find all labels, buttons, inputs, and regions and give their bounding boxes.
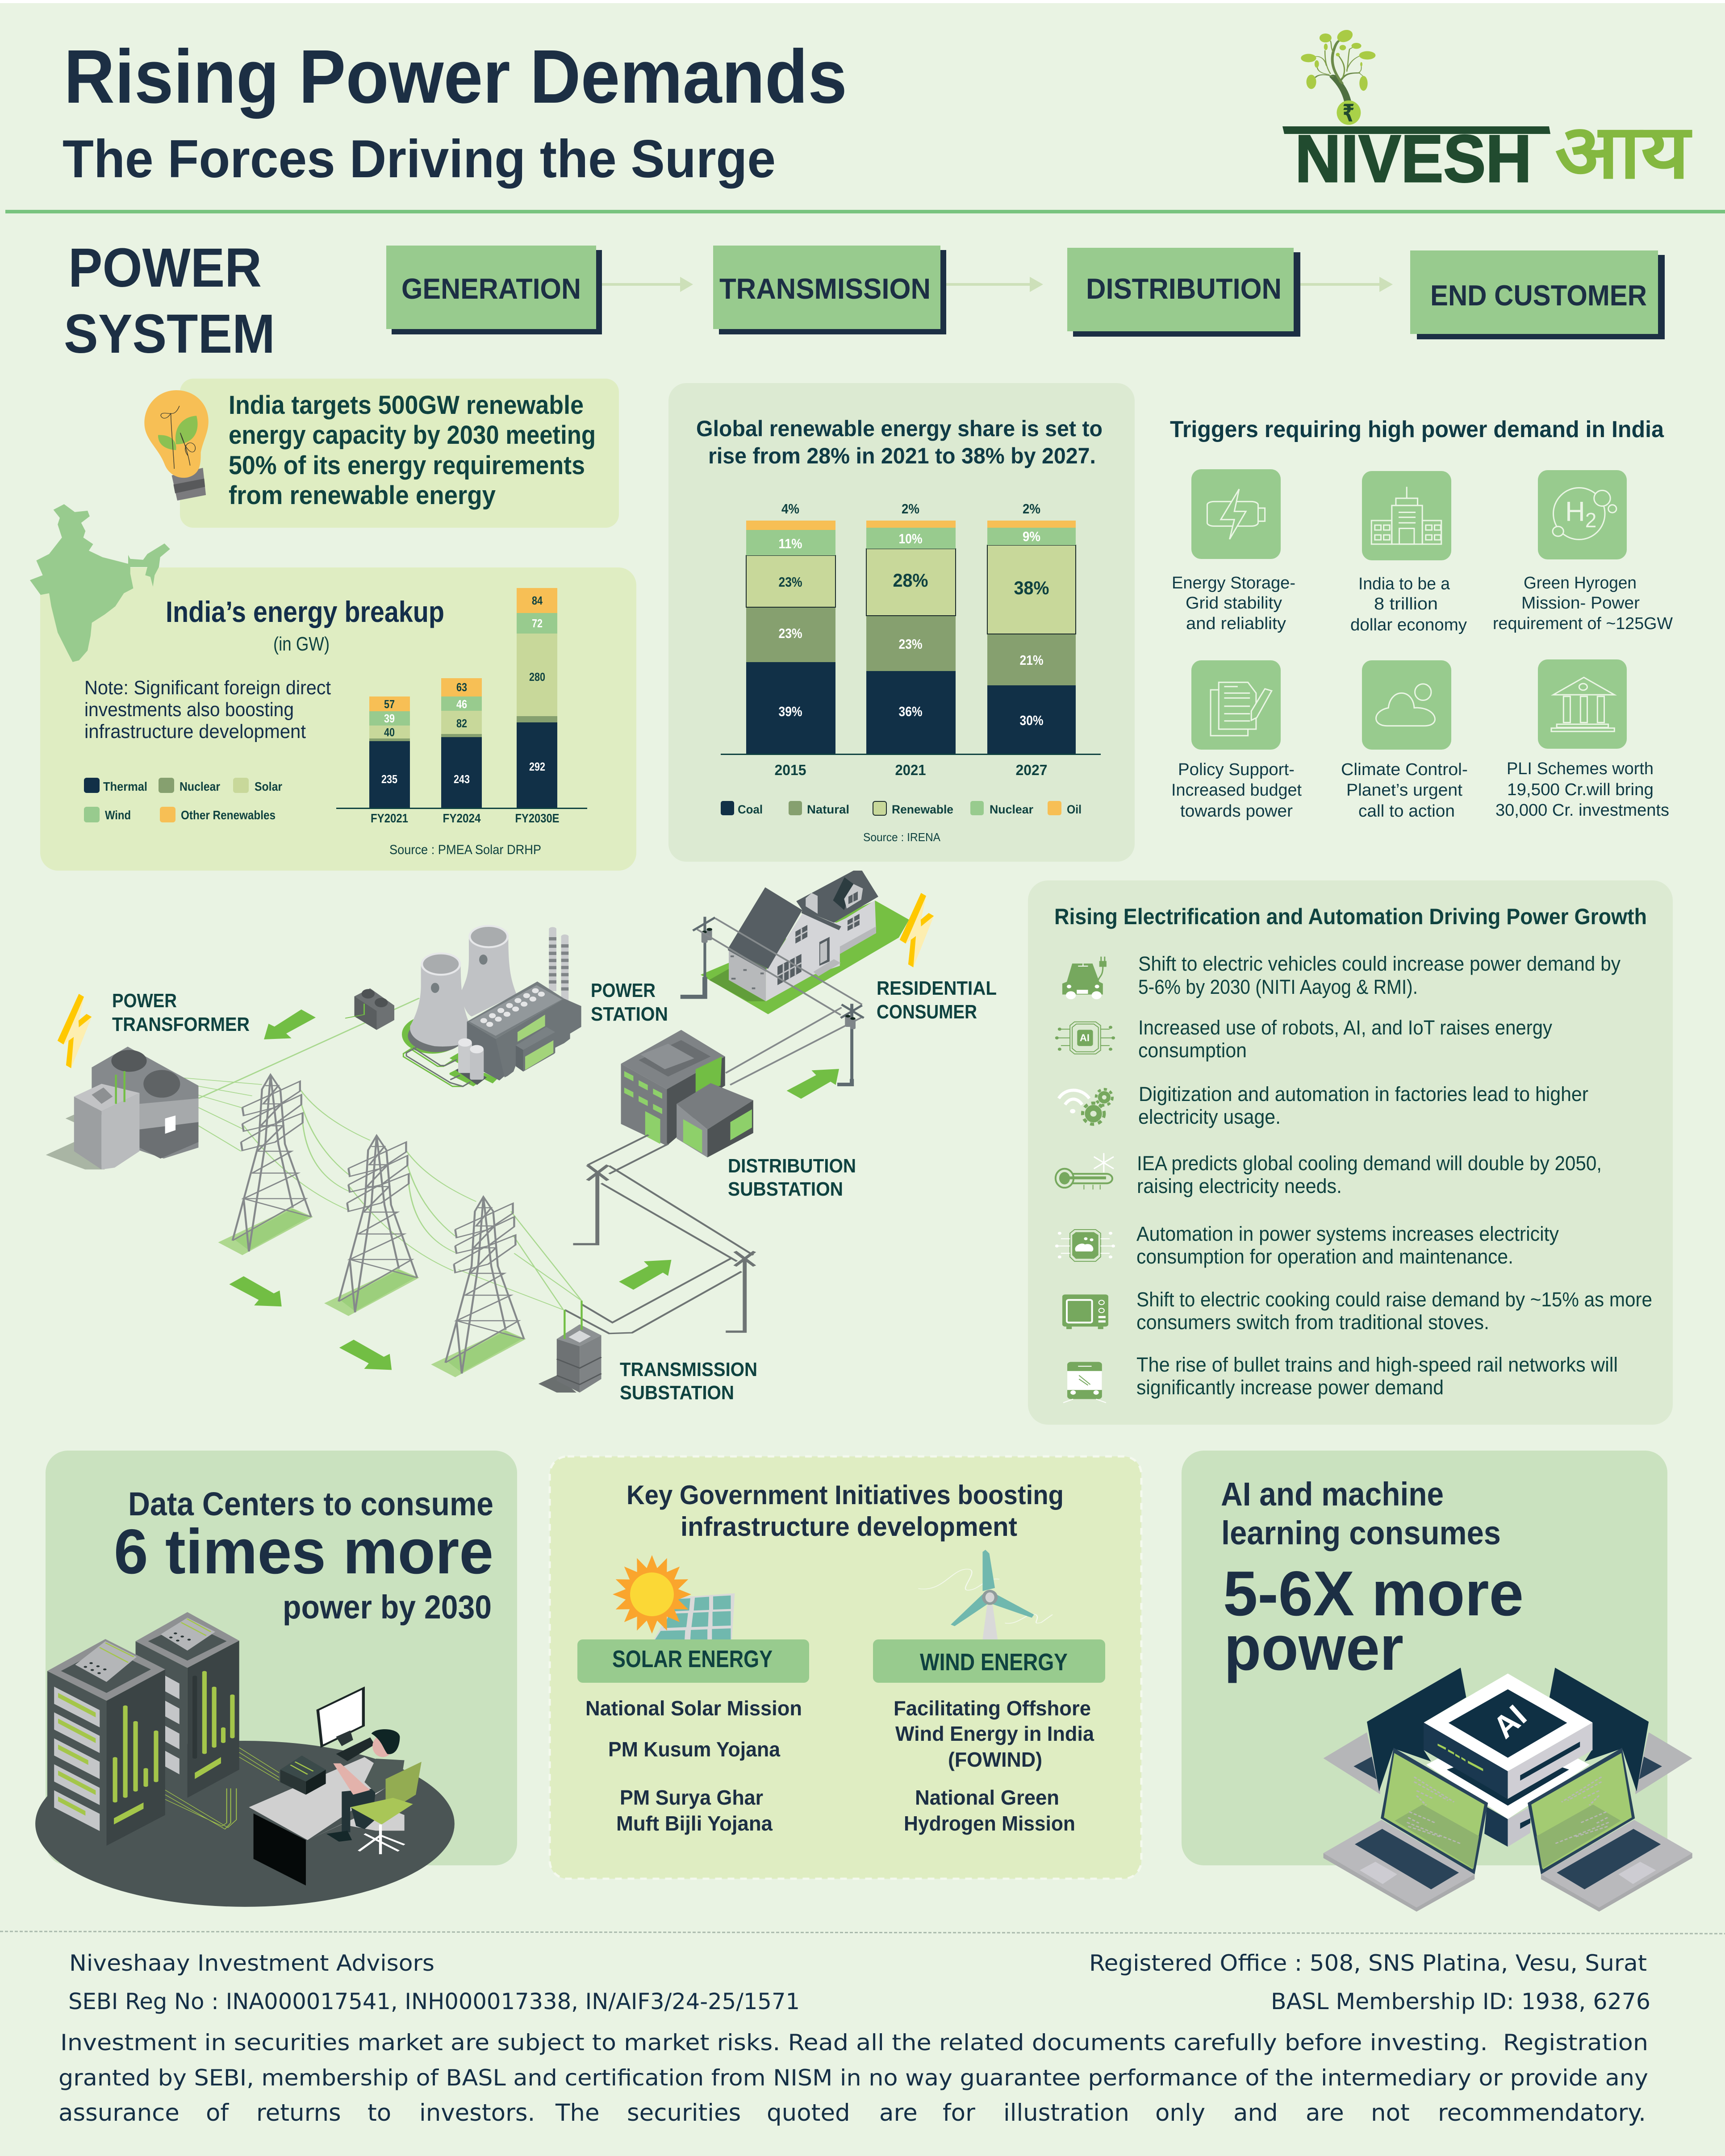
labels: TRANSMISSION xyxy=(620,1359,757,1380)
lightning right xyxy=(900,893,934,967)
list text: consumers switch from traditional stoves. xyxy=(1136,1311,1489,1334)
captions: Energy Storage- xyxy=(1172,574,1295,592)
icon: electric car xyxy=(1062,957,1107,999)
tower 3 xyxy=(431,1197,526,1377)
text: AI xyxy=(1221,1476,1524,1684)
legend: Oil xyxy=(1067,803,1082,816)
legend: Coal xyxy=(738,803,763,816)
illustration: AI chip with laptops xyxy=(1324,1668,1692,1912)
bar chart: capacity: 63 xyxy=(456,680,467,694)
H2 symbol: 2 xyxy=(1585,509,1596,532)
band: solar energy: SOLAR ENERGY xyxy=(612,1646,773,1672)
stacked bar chart: 23% xyxy=(779,626,802,641)
footer: advisor details: Niveshaay Investment Advisors xyxy=(69,1950,434,1976)
chair xyxy=(350,1762,422,1854)
bar chart: capacity: 292 xyxy=(529,760,545,773)
H2 symbol: H xyxy=(1565,496,1585,527)
captions: Increased budget xyxy=(1171,781,1302,800)
labels: SUBSTATION xyxy=(620,1382,734,1404)
labels: SUBSTATION xyxy=(728,1178,843,1200)
desktop unit xyxy=(280,1756,326,1795)
note: Note: Significant foreign direct xyxy=(84,677,331,699)
text: data centers: 6 times more xyxy=(114,1516,493,1587)
footer: disclaimer: The xyxy=(555,2099,600,2127)
icon: wifi gears xyxy=(1059,1089,1112,1124)
line icons xyxy=(1207,487,1616,736)
logo: Nivesh Aay: आय xyxy=(1555,110,1692,194)
icon tiles xyxy=(1191,469,1627,750)
captions: dollar economy xyxy=(1350,616,1467,634)
bar chart: capacity: 280 xyxy=(529,670,545,684)
heading: Key Government Initiatives boosting xyxy=(627,1480,1064,1510)
stacked bar chart: 4% xyxy=(781,501,799,517)
back laptops xyxy=(1324,1732,1692,1794)
heading: Rising Electrification and Automation Driving Power Growth xyxy=(1054,904,1647,929)
laptop: front left xyxy=(1324,1747,1488,1912)
list text: Automation in power systems increases electricity xyxy=(1136,1222,1559,1245)
labels xyxy=(112,977,997,1404)
title: Rising Power Demands xyxy=(64,34,847,119)
tower 2 xyxy=(324,1135,419,1316)
logo: Nivesh Aay: NIVESH xyxy=(1295,121,1532,196)
bar chart: capacity: 39 xyxy=(384,712,395,725)
captions: towards power xyxy=(1180,802,1293,821)
panel: government initiatives xyxy=(550,1456,1141,1879)
bar chart: capacity: FY2030E xyxy=(515,811,559,825)
band: wind energy: WIND ENERGY xyxy=(920,1649,1068,1676)
pole: right xyxy=(837,1004,864,1084)
back server xyxy=(136,1612,239,1798)
list: solar schemes: PM Surya Ghar xyxy=(620,1786,763,1809)
band: solar energy xyxy=(577,1639,809,1683)
bar chart: capacity: 235 xyxy=(381,772,397,786)
captions: and reliablity xyxy=(1186,614,1286,633)
heading: power system xyxy=(64,238,275,365)
list: wind schemes xyxy=(894,1697,1094,1835)
labels: RESIDENTIAL xyxy=(877,977,997,999)
wires xyxy=(125,998,582,1310)
list text: 5-6% by 2030 (NITI Aayog & RMI). xyxy=(1138,976,1418,998)
list text: consumption for operation and maintenance. xyxy=(1136,1245,1513,1268)
list text: IEA predicts global cooling demand will double by 2050, xyxy=(1137,1152,1602,1175)
stacked bar chart: 39% xyxy=(779,704,802,719)
text: data centers: Data Centers to consume xyxy=(128,1485,493,1522)
legend: Natural xyxy=(807,803,849,816)
heading: power system: POWER xyxy=(68,238,262,299)
stacked bar chart: 21% xyxy=(1020,652,1043,668)
captions xyxy=(1171,574,1673,821)
captions: India to be a xyxy=(1358,575,1450,593)
tower 1 xyxy=(218,1075,313,1255)
panel: electrification and automation xyxy=(1028,880,1673,1425)
text: data centers xyxy=(114,1485,493,1626)
footer divider xyxy=(0,1931,1725,1934)
bar chart: capacity: 243 xyxy=(454,772,470,786)
footer: disclaimer: only xyxy=(1155,2099,1205,2127)
captions: 30,000 Cr. investments xyxy=(1495,801,1669,820)
arrow xyxy=(602,277,693,292)
captions: 8 trillion xyxy=(1374,595,1438,613)
heading xyxy=(696,416,1103,468)
captions: Grid stability xyxy=(1186,594,1282,613)
bar chart: capacity: FY2021 xyxy=(371,811,408,825)
stacked bar chart: 2021 xyxy=(895,762,926,778)
captions: requirement of ~125GW xyxy=(1493,614,1673,633)
captions: 19,500 Cr.will bring xyxy=(1507,780,1654,799)
list: solar schemes xyxy=(585,1697,802,1835)
AI mark: AI xyxy=(1487,1698,1533,1745)
icon: wind turbine xyxy=(918,1550,1053,1639)
dark back panels xyxy=(1367,1668,1649,1792)
heading: infrastructure development xyxy=(681,1512,1017,1542)
icon: light bulb xyxy=(144,390,209,500)
list: wind schemes: National Green xyxy=(915,1786,1059,1809)
captions: Green Hyrogen xyxy=(1524,574,1637,592)
lower stack xyxy=(1426,1758,1590,1847)
panel: data centers xyxy=(35,1451,517,1907)
stacked bar chart: 9% xyxy=(1023,529,1040,544)
arrows xyxy=(229,1009,839,1370)
bar chart: capacity: 84 xyxy=(532,594,543,607)
footer: disclaimer: illustration xyxy=(1003,2099,1129,2127)
list text: Increased use of robots, AI, and IoT raises energy xyxy=(1138,1016,1552,1039)
lightning left xyxy=(58,994,92,1068)
heading: rise from 28% in 2021 to 38% by 2027. xyxy=(708,443,1096,468)
logo: Nivesh Aay: ₹ xyxy=(1342,99,1355,127)
heading: Triggers requiring high power demand in India xyxy=(1170,417,1664,442)
bar chart: capacity: 46 xyxy=(456,697,467,711)
footer: disclaimer: not xyxy=(1371,2099,1410,2127)
stacked bar chart: 2015 xyxy=(774,762,806,778)
bar chart: capacity: 72 xyxy=(532,617,543,630)
list text: Shift to electric cooking could raise demand by ~15% as more xyxy=(1136,1288,1652,1311)
text: target: India targets 500GW renewable xyxy=(229,391,584,420)
footer: disclaimer: returns xyxy=(256,2099,341,2127)
list text: The rise of bullet trains and high-speed rail networks will xyxy=(1136,1353,1618,1376)
labels: POWER xyxy=(112,990,177,1012)
box: transmission xyxy=(713,246,946,334)
text: target: 50% of its energy requirements xyxy=(229,451,585,480)
map: India xyxy=(30,504,170,662)
panel: India's energy breakup xyxy=(30,504,636,871)
labels: CONSUMER xyxy=(877,1001,977,1023)
transmission substation xyxy=(539,1301,601,1393)
captions: Mission- Power xyxy=(1521,594,1640,613)
icon: solar panel xyxy=(654,1593,735,1639)
AI chip label: AI xyxy=(1080,1032,1090,1043)
footer: disclaimer: and xyxy=(1233,2099,1278,2127)
monitor xyxy=(318,1688,363,1746)
list: solar schemes: National Solar Mission xyxy=(585,1697,802,1720)
icon: automation cloud xyxy=(1055,1230,1115,1261)
note xyxy=(84,677,331,742)
footer: disclaimer: for xyxy=(943,2099,975,2127)
footer: advisor details: BASL Membership ID: 1938, 6276 xyxy=(1271,1989,1650,2014)
icon: sun xyxy=(613,1555,691,1634)
front server xyxy=(47,1639,165,1846)
keyboard xyxy=(336,1737,375,1761)
bar chart: capacity xyxy=(336,588,587,825)
box: generation: GENERATION xyxy=(401,272,581,305)
source: Source : PMEA Solar DRHP xyxy=(389,842,541,857)
box: distribution: DISTRIBUTION xyxy=(1086,272,1282,305)
list text: significantly increase power demand xyxy=(1136,1376,1444,1399)
footer: advisor details: Registered Office : 508, SNS Platina, Vesu, Surat xyxy=(1089,1950,1647,1976)
source: Source : IRENA xyxy=(863,830,941,844)
list icons xyxy=(1055,957,1115,1403)
distribution building xyxy=(621,1030,753,1157)
list text: raising electricity needs. xyxy=(1137,1175,1342,1197)
service wires xyxy=(697,918,862,1085)
panel: renewable target xyxy=(144,379,619,528)
panel: global renewable share xyxy=(668,383,1135,862)
captions: Planet’s urgent xyxy=(1346,781,1462,800)
labels: STATION xyxy=(591,1003,668,1025)
list text xyxy=(1136,952,1652,1399)
list: wind schemes: (FOWIND) xyxy=(948,1748,1042,1771)
cube xyxy=(1424,1673,1592,1799)
text: target xyxy=(229,391,596,510)
stacked bar chart: 38% xyxy=(1014,577,1049,598)
heading xyxy=(166,595,444,655)
text: AI: AI and machine xyxy=(1221,1476,1444,1513)
stacked bar chart: 2% xyxy=(1023,501,1040,517)
note: infrastructure development xyxy=(84,721,306,742)
list: solar schemes: PM Kusum Yojana xyxy=(608,1738,780,1761)
text: data centers: power by 2030 xyxy=(283,1589,492,1626)
list text: consumption xyxy=(1138,1039,1247,1062)
text: target: energy capacity by 2030 meeting xyxy=(229,421,596,450)
footer: disclaimer: granted by SEBI, membership of BASL and certification from NISM in no way guarantee performance of the intermediary or provide any xyxy=(58,2065,1648,2091)
list: solar schemes: Muft Bijli Yojana xyxy=(616,1812,773,1835)
box: transmission: TRANSMISSION xyxy=(719,272,931,305)
power transformer building xyxy=(46,1047,198,1169)
note: investments also boosting xyxy=(84,699,294,721)
footer: disclaimer: are xyxy=(1306,2099,1344,2127)
section: triggers xyxy=(1170,417,1673,821)
footer: disclaimer: recommendatory. xyxy=(1438,2099,1646,2127)
stacked bar chart: 11% xyxy=(779,536,802,551)
illustration: server room xyxy=(35,1612,455,1907)
footer: disclaimer: investors. xyxy=(419,2099,535,2127)
heading: power system: SYSTEM xyxy=(64,304,275,365)
stacked bar chart xyxy=(721,501,1101,778)
footer: disclaimer: are xyxy=(879,2099,918,2127)
flow: generation to end customer xyxy=(386,246,1665,339)
list text: Shift to electric vehicles could increase power demand by xyxy=(1138,952,1621,975)
captions: call to action xyxy=(1358,802,1455,821)
heading xyxy=(627,1480,1064,1542)
box: generation xyxy=(386,246,602,334)
footer: disclaimer: to xyxy=(368,2099,391,2127)
stacked bar chart: 30% xyxy=(1020,713,1043,728)
labels: TRANSFORMER xyxy=(112,1013,250,1035)
footer: disclaimer: quoted xyxy=(767,2099,850,2127)
stacked bar chart: 36% xyxy=(898,704,923,719)
list: wind schemes: Hydrogen Mission xyxy=(904,1812,1075,1835)
legend: Solar xyxy=(255,780,282,793)
arrow xyxy=(1300,277,1393,292)
pole: left xyxy=(681,917,715,997)
person xyxy=(326,1729,405,1842)
captions: Climate Control- xyxy=(1341,760,1468,779)
legend xyxy=(84,778,282,822)
stacked bar chart: 28% xyxy=(893,570,928,591)
legend: Thermal xyxy=(103,780,147,793)
legend xyxy=(721,801,1082,816)
text: AI: power xyxy=(1224,1613,1403,1684)
list: wind schemes: Facilitating Offshore xyxy=(894,1697,1091,1720)
arrow xyxy=(946,277,1043,292)
footer: disclaimer xyxy=(58,2030,1648,2127)
poles and lines xyxy=(564,1135,755,1334)
text: AI: learning consumes xyxy=(1221,1514,1501,1551)
laptop: front right xyxy=(1528,1747,1692,1912)
small transformer box xyxy=(345,988,394,1030)
footer: disclaimer: Investment in securities market are subject to market risks. Read all the related documents carefully before investing. Registration xyxy=(60,2030,1648,2056)
text: AI: 5-6X more xyxy=(1223,1558,1524,1629)
footer: disclaimer: of xyxy=(206,2099,229,2127)
bar chart: capacity: FY2024 xyxy=(443,811,481,825)
legend: Nuclear xyxy=(180,780,220,793)
stacked bar chart: 2027 xyxy=(1015,762,1048,778)
box: end customer: END CUSTOMER xyxy=(1430,279,1647,312)
logo: Nivesh Aay xyxy=(1282,29,1692,196)
legend: Renewable xyxy=(892,803,953,816)
bar chart: capacity: 82 xyxy=(456,717,467,730)
list text: Digitization and automation in factories lead to higher xyxy=(1139,1083,1588,1105)
subtitle: The Forces Driving the Surge xyxy=(63,129,776,189)
stacked bar chart: 2% xyxy=(902,501,919,517)
stacked bar chart: 23% xyxy=(779,574,802,590)
power station xyxy=(402,925,581,1086)
legend: Wind xyxy=(105,808,131,822)
icon: AI chip xyxy=(1056,1022,1115,1054)
heading: India’s energy breakup xyxy=(166,595,444,628)
icon: thermometer xyxy=(1056,1153,1114,1189)
stacked bar chart: 10% xyxy=(898,531,923,546)
footer: disclaimer: assurance xyxy=(58,2099,180,2127)
band: wind energy xyxy=(873,1639,1105,1683)
panel: AI power xyxy=(1182,1451,1692,1912)
stacked bar chart: 23% xyxy=(898,636,923,652)
text: target: from renewable energy xyxy=(229,481,496,510)
heading: Global renewable energy share is set to xyxy=(696,416,1103,441)
captions: PLI Schemes worth xyxy=(1507,759,1654,778)
box: distribution xyxy=(1067,248,1300,337)
footer: advisor details: SEBI Reg No : INA000017541, INH000017338, IN/AIF3/24-25/1571 xyxy=(68,1989,800,2014)
captions: Policy Support- xyxy=(1178,760,1295,779)
diagram: power grid xyxy=(46,871,997,1404)
list text: electricity usage. xyxy=(1138,1105,1281,1128)
heading: (in GW) xyxy=(273,633,330,655)
bar chart: capacity: 40 xyxy=(384,726,395,739)
list: wind schemes: Wind Energy in India xyxy=(895,1722,1094,1745)
icon: microwave xyxy=(1062,1294,1108,1329)
bar chart: capacity: 57 xyxy=(384,697,395,711)
legend: Nuclear xyxy=(990,803,1033,816)
house and lines xyxy=(681,871,909,1085)
legend: Other Renewables xyxy=(181,808,276,822)
icon: train xyxy=(1063,1362,1106,1403)
desk xyxy=(249,1757,405,1885)
footer: advisor details xyxy=(68,1950,1650,2014)
box: end customer xyxy=(1410,250,1665,339)
labels: DISTRIBUTION xyxy=(728,1155,856,1177)
footer: disclaimer: securities xyxy=(627,2099,741,2127)
labels: POWER xyxy=(591,980,656,1001)
